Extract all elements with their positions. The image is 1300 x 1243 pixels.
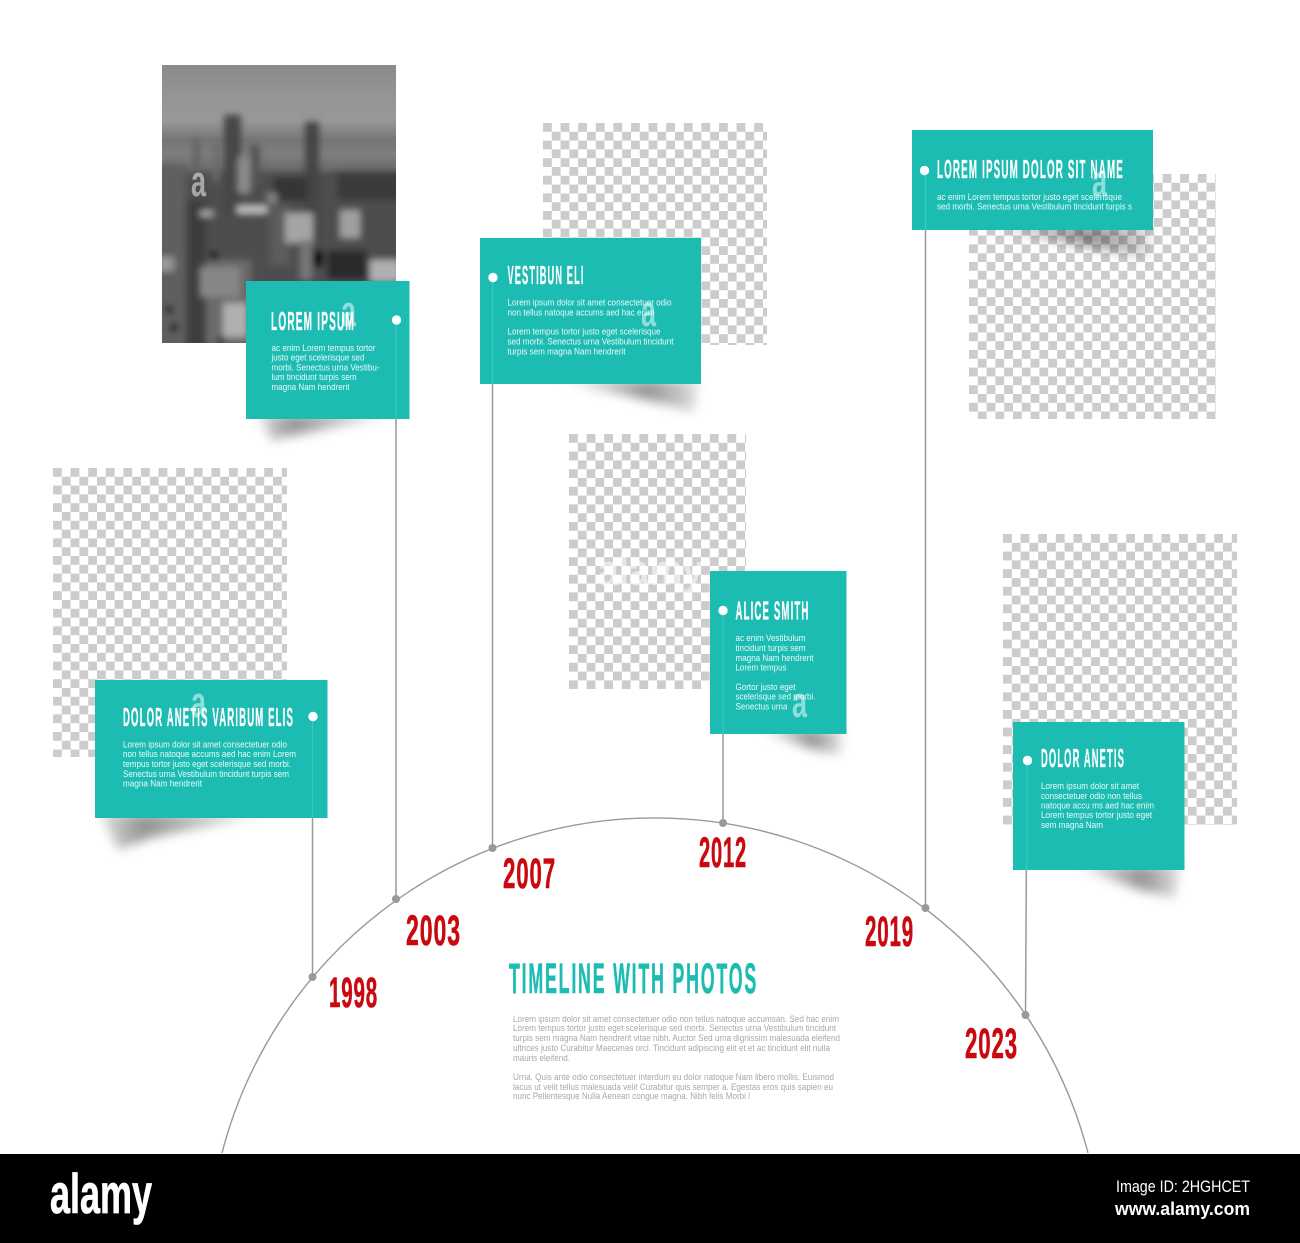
watermark letters: a [341,287,356,336]
year labels [329,829,1018,1068]
panel: 2007 Vestibun Eli: sed morbi. Senectus urna Vestibulum tincidunt [508,337,674,347]
text: DOLOR ANETIS VARIBUM ELIS [123,702,294,732]
panel: 1998 Dolor Anetis Varibum Elis: non tellus natoque accums aed hac enim Lorem [123,749,296,759]
panel: 2003 Lorem Ipsum: LOREM IPSUM [271,306,355,336]
intro text: Urna. Quis ante odio consectetuer interdum eu dolor natoque Nam libero mollis. Euismod [513,1072,834,1082]
photo placeholder: left [53,468,287,757]
year labels: 2012 [699,829,747,877]
footer url: www.alamy.com [1114,1199,1250,1219]
photo placeholder: top centre [543,123,767,345]
panel: 1998 Dolor Anetis Varibum Elis: tempus tortor justo eget scelerisque sed morbi. [123,759,291,769]
panel: 2012 Alice Smith: ac enim Vestibulum [736,633,806,643]
panel: 2007 Vestibun Eli: VESTIBUN ELI [508,260,584,290]
year labels: 2019 [865,908,914,956]
panel: 2012 Alice Smith: Senectus urna [736,702,788,712]
panel: 2007 Vestibun Eli: Lorem ipsum dolor sit amet consectetuer odio [508,298,672,308]
panel: 1998 Dolor Anetis Varibum Elis: magna Nam hendrerit [123,778,203,788]
panel: 2012 Alice Smith: ALICE SMITH [736,595,810,625]
footer image id: Image ID: 2HGHCET [1116,1177,1250,1196]
panel: 2007 Vestibun Eli: turpis sem magna Nam hendrerit [508,347,626,357]
intro text: Lorem ipsum dolor sit amet consectetuer odio non tellus natoque accumsan. Sed hac enim [513,1014,839,1024]
text: TIMELINE WITH PHOTOS [509,955,758,1003]
watermark letters: a [1092,157,1107,206]
panel: 2007 Vestibun Eli [480,238,701,384]
watermark letters: a [792,678,807,727]
intro text: lacus ut velit tellus malesuada velit Curabitur quis semper a. Egestas eros quis sapien eu [513,1082,833,1092]
panel: 2003 Lorem Ipsum: ac enim Lorem tempus tortor [272,343,376,353]
panel: 2023 Dolor Anetis [1013,722,1184,870]
watermark letters: alamy [598,546,703,595]
panel: 2023 Dolor Anetis: sem magna Nam [1041,820,1103,830]
panel: 2012 Alice Smith: Lorem tempus [736,662,787,672]
panel: 2023 Dolor Anetis: Lorem tempus tortor justo eget [1041,810,1153,820]
intro text: turpis sem magna Nam hendrerit vitae nibh. Auctor Sed urna dignissim malesuada eleifend [513,1033,840,1043]
year labels: 2003 [406,907,461,955]
photo placeholder: top right [969,174,1216,419]
footer bar [0,1154,1300,1243]
intro text [513,1014,840,1101]
panel: 2023 Dolor Anetis: consectetuer odio non tellus [1041,791,1143,801]
photo: blurred city skyline [155,65,405,352]
panel: 2019 Lorem Ipsum Dolor Sit Name [912,130,1153,230]
panel: 2003 Lorem Ipsum: justo eget scelerisque sed [271,352,365,362]
panel: 2023 Dolor Anetis: Lorem ipsum dolor sit amet [1041,781,1140,791]
panel: 2003 Lorem Ipsum: lum tincidunt turpis sem [272,372,356,382]
intro text: nunc Pellentesque Nulla Aenean congue magna. Nibh felis Morbi l [513,1091,750,1101]
photo placeholder: right [1003,534,1237,825]
panel: 2019 Lorem Ipsum Dolor Sit Name: sed morbi. Senectus urna Vestibulum tincidunt turpis s [937,202,1133,212]
watermark letters: a [641,287,656,336]
watermark letters: a [191,678,206,727]
photo placeholder: middle [569,434,746,689]
intro text: mauris eleifend. [513,1053,570,1063]
panel: 2019 Lorem Ipsum Dolor Sit Name: ac enim Lorem tempus tortor justo eget scelerisque [937,192,1122,202]
footer logo: alamy [50,1162,152,1225]
panel: 2012 Alice Smith [710,571,846,734]
watermark letters: a [191,157,206,206]
panel: 2012 Alice Smith: magna Nam hendrerit [736,653,814,663]
intro text: Lorem tempus tortor justo eget scelerisque sed morbi. Senectus urna Vestibulum tincidunt [513,1023,837,1033]
panel: 1998 Dolor Anetis Varibum Elis: Senectus urna Vestibulum tincidunt turpis sem [123,769,289,779]
panel: 2023 Dolor Anetis: DOLOR ANETIS [1041,743,1125,773]
year labels: 1998 [329,969,378,1017]
panel: 2007 Vestibun Eli: Lorem tempus tortor justo eget scelerisque [508,327,661,337]
arc: timeline curve [222,818,1088,1153]
panel: 1998 Dolor Anetis Varibum Elis: Lorem ipsum dolor sit amet consectetuer odio [123,740,287,750]
panel: 2012 Alice Smith: Gortor justo eget [736,682,796,692]
connector lines and nodes [308,170,1030,1019]
panel: 2003 Lorem Ipsum [246,281,410,419]
watermark letters [191,157,1107,727]
panel: 2012 Alice Smith: tincidunt turpis sem [736,643,806,653]
panel: 2023 Dolor Anetis: natoque accu ms aed hac enim [1041,800,1154,810]
panel: 2012 Alice Smith: scelerisque sed morbi. [736,692,816,702]
panel: 2007 Vestibun Eli: non tellus natoque accums aed hac enim [508,307,654,317]
card shadows [100,225,1180,898]
year labels: 2023 [965,1020,1018,1068]
panel: 2003 Lorem Ipsum: morbi. Senectus urna Vestibu- [272,362,380,372]
panel: 1998 Dolor Anetis Varibum Elis [95,680,328,818]
year labels: 2007 [503,850,556,898]
panel: 2003 Lorem Ipsum: magna Nam hendrerit [272,382,350,392]
intro text: ultrices justo Curabitur Maecenas orci. Tincidunt adipiscing elit et et ac tincidunt elit nulla [513,1043,830,1053]
